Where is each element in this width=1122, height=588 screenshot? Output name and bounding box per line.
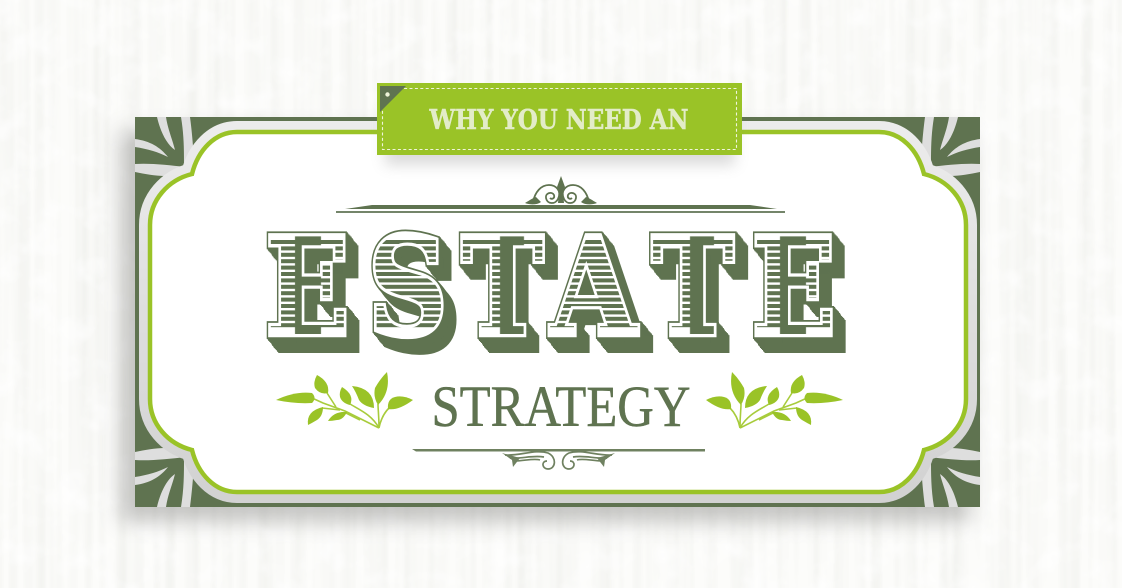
subtitle: STRATEGY: STRATEGY	[432, 374, 690, 439]
ribbon text: WHY YOU NEED AN	[429, 105, 688, 136]
title: ESTATE: ESTATE	[266, 208, 836, 366]
rays: top right	[920, 117, 980, 176]
dark green frame	[135, 117, 980, 507]
ribbon shadow	[385, 105, 735, 165]
rays: top left	[135, 117, 195, 176]
top ornament with rule	[336, 176, 785, 213]
title: ESTATE: ESTATE	[266, 208, 836, 366]
rays: bottom left	[135, 448, 195, 507]
frame drop shadow	[120, 130, 970, 522]
ribbon banner	[377, 83, 742, 155]
icon: left leaf sprig	[276, 372, 413, 428]
icon: right leaf sprig	[706, 372, 843, 428]
panel: silver band, green border and white plaque	[150, 132, 966, 492]
rays: bottom right	[920, 448, 980, 507]
title: ESTATE: ESTATE	[266, 208, 836, 366]
icon: folded corner with pin	[380, 86, 406, 112]
bottom ornament with rule	[412, 449, 705, 469]
corner rays	[135, 117, 980, 507]
